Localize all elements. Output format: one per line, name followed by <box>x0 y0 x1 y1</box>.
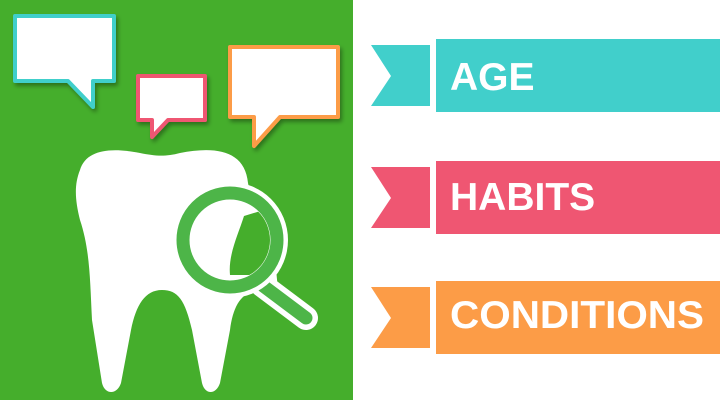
magnifier handle <box>262 285 306 318</box>
icon: teal speech bubble <box>15 16 114 107</box>
ribbon: CONDITIONS <box>371 281 720 354</box>
ribbon: AGE: AGE <box>450 56 535 99</box>
ribbon: CONDITIONS: CONDITIONS <box>450 294 704 337</box>
ribbon: HABITS: HABITS <box>450 176 595 219</box>
icon: orange speech bubble <box>230 47 338 146</box>
icon: pink speech bubble <box>138 76 205 137</box>
panel: green background <box>0 0 353 400</box>
ribbon: AGE <box>371 39 720 112</box>
icon: tooth with magnifier <box>76 150 306 392</box>
ribbon: HABITS <box>371 161 720 234</box>
